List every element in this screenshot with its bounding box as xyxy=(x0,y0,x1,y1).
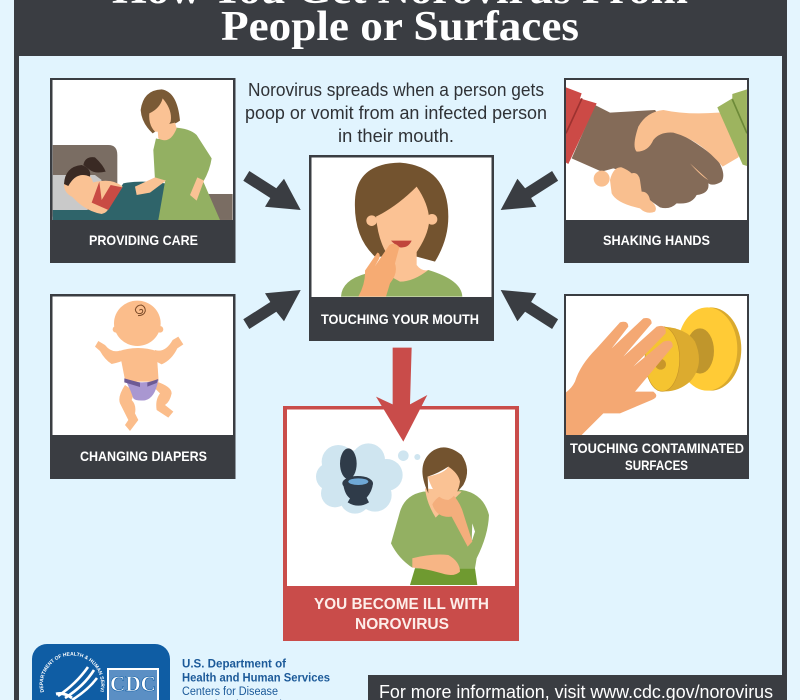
panel: you become ill xyxy=(283,406,519,641)
label: SURFACES xyxy=(625,457,688,473)
panel: shaking hands xyxy=(564,78,749,263)
label: TOUCHING YOUR MOUTH xyxy=(321,311,479,327)
panel: touching contaminated surfaces xyxy=(564,294,749,479)
label: SHAKING HANDS xyxy=(603,232,710,248)
arrow: shaking hands to mouth xyxy=(501,171,558,210)
panel: providing care xyxy=(50,78,236,263)
HHS seal: DEPARTMENT OF HEALTH & HUMAN SERVICES xyxy=(40,652,104,692)
panel: touching your mouth xyxy=(309,155,494,341)
arrow: mouth to illness xyxy=(376,348,427,442)
intro text xyxy=(245,80,547,146)
illustration: hand on door knob xyxy=(566,307,741,435)
arrow: surfaces to mouth xyxy=(501,290,558,329)
intro text: poop or vomit from an infected person xyxy=(245,103,547,123)
title: People or Surfaces xyxy=(221,4,579,50)
intro text: in their mouth. xyxy=(338,126,454,146)
arrow: providing care to mouth xyxy=(243,171,301,210)
label: YOU BECOME ILL WITH xyxy=(314,596,489,613)
label: TOUCHING CONTAMINATED xyxy=(570,440,744,456)
agency text: U.S. Department of xyxy=(182,658,286,670)
intro text: Norovirus spreads when a person gets xyxy=(248,80,544,100)
title xyxy=(112,0,688,50)
logo: HHS and CDC xyxy=(32,644,170,700)
agency text: Health and Human Services xyxy=(182,672,330,684)
label: NOROVIRUS xyxy=(355,616,449,633)
agency text: Centers for Disease xyxy=(182,686,278,698)
label xyxy=(314,596,489,633)
agency text xyxy=(182,658,330,700)
illustration: caregiver and sick child in bed xyxy=(53,89,233,220)
CDC mark: CDC xyxy=(110,671,156,696)
HHS seal xyxy=(40,652,104,700)
illustration: woman touching mouth xyxy=(341,163,462,297)
arrow: changing diapers to mouth xyxy=(243,290,301,329)
label xyxy=(570,440,744,473)
label: PROVIDING CARE xyxy=(89,232,198,248)
illustration: sick woman thinking of toilet xyxy=(316,443,489,585)
label: CHANGING DIAPERS xyxy=(80,448,207,464)
panel: changing diapers xyxy=(50,294,236,479)
illustration: baby in diaper xyxy=(95,301,183,431)
illustration: handshake xyxy=(566,87,748,213)
